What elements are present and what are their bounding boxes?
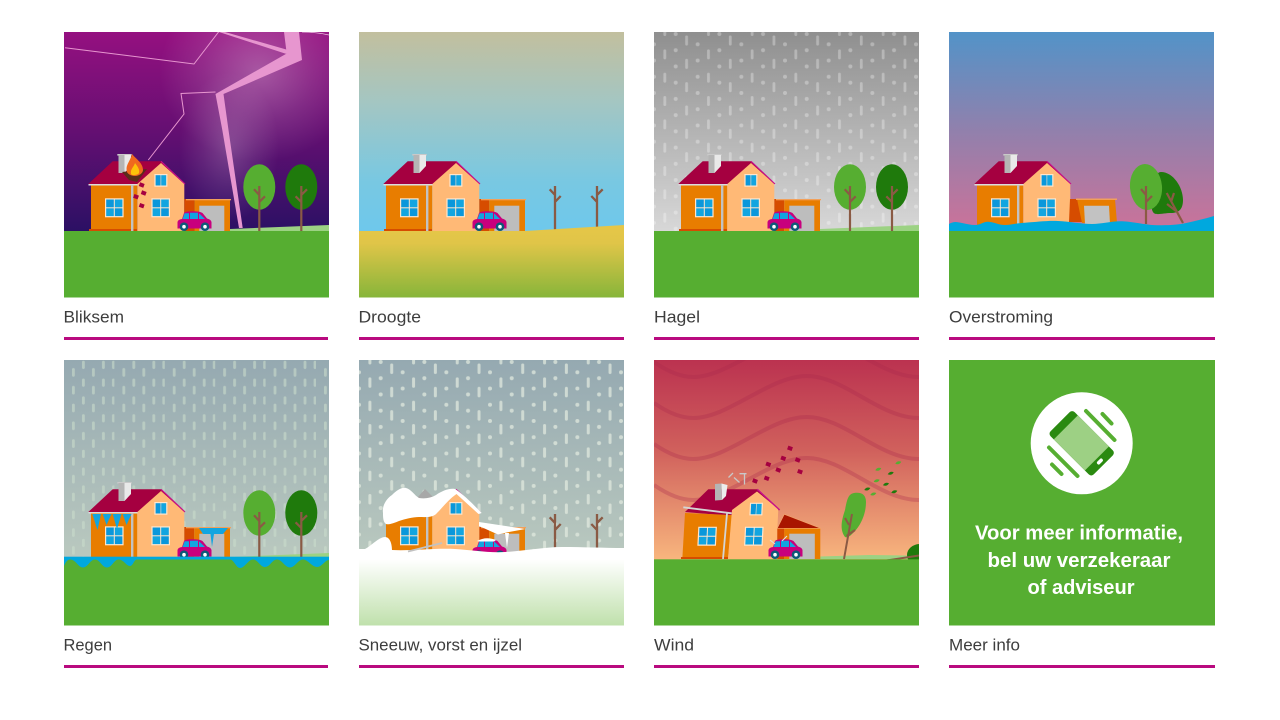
dry ground <box>359 225 624 298</box>
lightning bolt <box>65 31 329 228</box>
chimney <box>117 482 132 501</box>
label: Sneeuw, vorst en ijzel: Sneeuw, vorst en ijzel <box>358 636 522 654</box>
hill <box>230 553 329 559</box>
car <box>768 539 802 559</box>
snow on garage <box>479 522 526 534</box>
house <box>88 161 185 231</box>
garage <box>777 514 821 559</box>
house <box>678 161 775 231</box>
car <box>178 211 212 231</box>
sky <box>654 360 919 560</box>
wind waves <box>654 335 919 500</box>
panel: Meer info <box>949 360 1215 626</box>
dark tree <box>285 490 317 557</box>
info text <box>975 522 1183 599</box>
garage <box>774 199 821 231</box>
car damage marks <box>770 536 787 544</box>
label: Bliksem: Bliksem <box>64 308 124 326</box>
bare tree <box>550 514 561 559</box>
label: Regen: Regen <box>64 636 112 654</box>
water layer <box>64 557 329 573</box>
tilted chimney <box>417 489 433 502</box>
fallen downpipe <box>408 543 442 552</box>
hail dots <box>654 32 919 232</box>
leaning house <box>681 489 780 559</box>
house <box>383 161 480 231</box>
chimney <box>412 154 427 173</box>
snow on car <box>477 538 496 542</box>
garage <box>184 527 231 559</box>
chimney <box>117 154 132 173</box>
ground <box>64 231 329 298</box>
panel: Droogte <box>359 32 624 298</box>
sky <box>359 32 624 232</box>
ground <box>949 231 1214 298</box>
ground <box>64 560 329 626</box>
car <box>472 211 506 231</box>
rain <box>64 360 329 560</box>
bare tree <box>591 186 603 231</box>
label: Wind: Wind <box>654 636 694 654</box>
bare tree <box>591 514 603 559</box>
ground <box>654 231 919 298</box>
fire on roof <box>122 154 147 182</box>
water drips under gutter <box>92 514 132 530</box>
flood water <box>949 216 1214 232</box>
fallen tree <box>885 544 933 566</box>
hail dashes <box>664 32 906 228</box>
snow dashes <box>359 360 624 560</box>
house walls <box>384 489 480 559</box>
panel: Hagel <box>654 32 919 298</box>
snow on roof <box>383 488 482 524</box>
garage <box>479 199 526 231</box>
label: Hagel: Hagel <box>654 308 700 326</box>
label: Droogte: Droogte <box>358 308 421 326</box>
garage <box>479 527 526 559</box>
flying chimney bits <box>728 473 746 484</box>
panel: Regen <box>64 360 329 626</box>
dark leaning tree <box>1152 172 1183 223</box>
lightning glow <box>172 32 329 208</box>
car <box>472 539 506 559</box>
dark tree <box>285 164 317 231</box>
flying leaves <box>864 461 901 495</box>
sky <box>64 360 329 560</box>
bare tree <box>550 186 561 231</box>
garage <box>1069 198 1117 224</box>
snow ground <box>359 537 624 626</box>
bent tree <box>842 493 866 559</box>
water on garage <box>199 528 228 547</box>
house <box>88 489 185 559</box>
panel: Bliksem <box>64 32 329 298</box>
tree <box>243 490 275 557</box>
panel: Sneeuw, vorst en ijzel <box>359 360 624 626</box>
house <box>974 161 1071 231</box>
debris bricks <box>133 182 147 208</box>
ground <box>654 559 919 626</box>
panel: Wind <box>654 335 933 626</box>
garage <box>184 199 231 231</box>
car <box>768 211 802 231</box>
label: Overstroming: Overstroming <box>949 308 1053 326</box>
sky <box>654 32 919 232</box>
hill <box>820 555 919 559</box>
car <box>178 539 212 559</box>
icon: phone rotating <box>1031 392 1133 494</box>
flying roof tiles <box>752 446 803 484</box>
panel: Overstroming <box>949 32 1214 298</box>
chimney <box>1003 154 1018 173</box>
sky <box>949 32 1214 232</box>
tree <box>834 164 866 231</box>
label: Meer info: Meer info <box>949 636 1020 654</box>
hill <box>820 225 919 231</box>
sky <box>359 360 624 560</box>
sky <box>64 32 329 232</box>
tree <box>1130 164 1162 224</box>
snow dots <box>359 360 624 560</box>
info text: bel uw verzekeraar <box>988 550 1171 572</box>
chimney <box>707 154 722 173</box>
tilted chimney <box>715 484 728 500</box>
tree <box>243 164 275 231</box>
info text: Voor meer informatie, <box>975 522 1183 544</box>
icicle on garage <box>505 533 509 548</box>
hill <box>230 225 329 231</box>
dark tree <box>876 164 908 231</box>
info text: of adviseur <box>1028 577 1135 599</box>
